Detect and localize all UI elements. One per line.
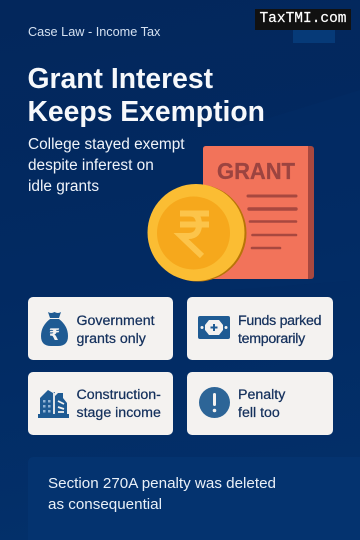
label: Funds parked	[238, 313, 321, 329]
label: Construction-	[76, 387, 161, 403]
subtitle	[28, 136, 185, 195]
title	[28, 62, 265, 127]
label: temporarily	[238, 331, 305, 347]
label: fell too	[238, 405, 280, 421]
icon: rupee coin	[148, 184, 246, 282]
label: stage income	[76, 405, 161, 421]
label: Penalty	[238, 387, 285, 403]
label: Government	[76, 313, 155, 329]
card: penalty	[187, 372, 333, 435]
icon: exclamation circle	[199, 387, 230, 418]
label: grants only	[76, 331, 146, 347]
icon: grant document	[203, 146, 314, 279]
subtitle: despite inferest on	[28, 157, 154, 174]
icon: money bag: ₹	[49, 325, 60, 344]
footer text: as consequential	[48, 496, 162, 513]
eyebrow: Case Law - Income Tax	[28, 25, 160, 39]
subtitle: College stayed exempt	[28, 136, 185, 153]
footer text: Section 270A penalty was deleted	[48, 475, 276, 492]
illustration: grant document and rupee coin	[148, 146, 314, 282]
brand badge	[255, 9, 351, 30]
label	[238, 387, 286, 421]
card: construction-stage income	[28, 372, 173, 435]
icon: banknote	[198, 316, 230, 339]
icon: grant document: GRANT	[217, 158, 296, 184]
card: funds parked	[187, 297, 333, 360]
title: Keeps Exemption	[28, 95, 265, 127]
label	[238, 313, 321, 347]
brand badge: TaxTMI.com	[259, 11, 346, 27]
icon: building	[38, 390, 69, 418]
title: Grant Interest	[28, 62, 213, 94]
subtitle: idle grants	[28, 178, 99, 195]
icon: money bag	[41, 312, 68, 346]
card: government grants	[28, 297, 173, 360]
label	[76, 313, 155, 347]
footer text	[48, 475, 276, 513]
label	[76, 387, 161, 421]
footer panel	[28, 457, 360, 540]
